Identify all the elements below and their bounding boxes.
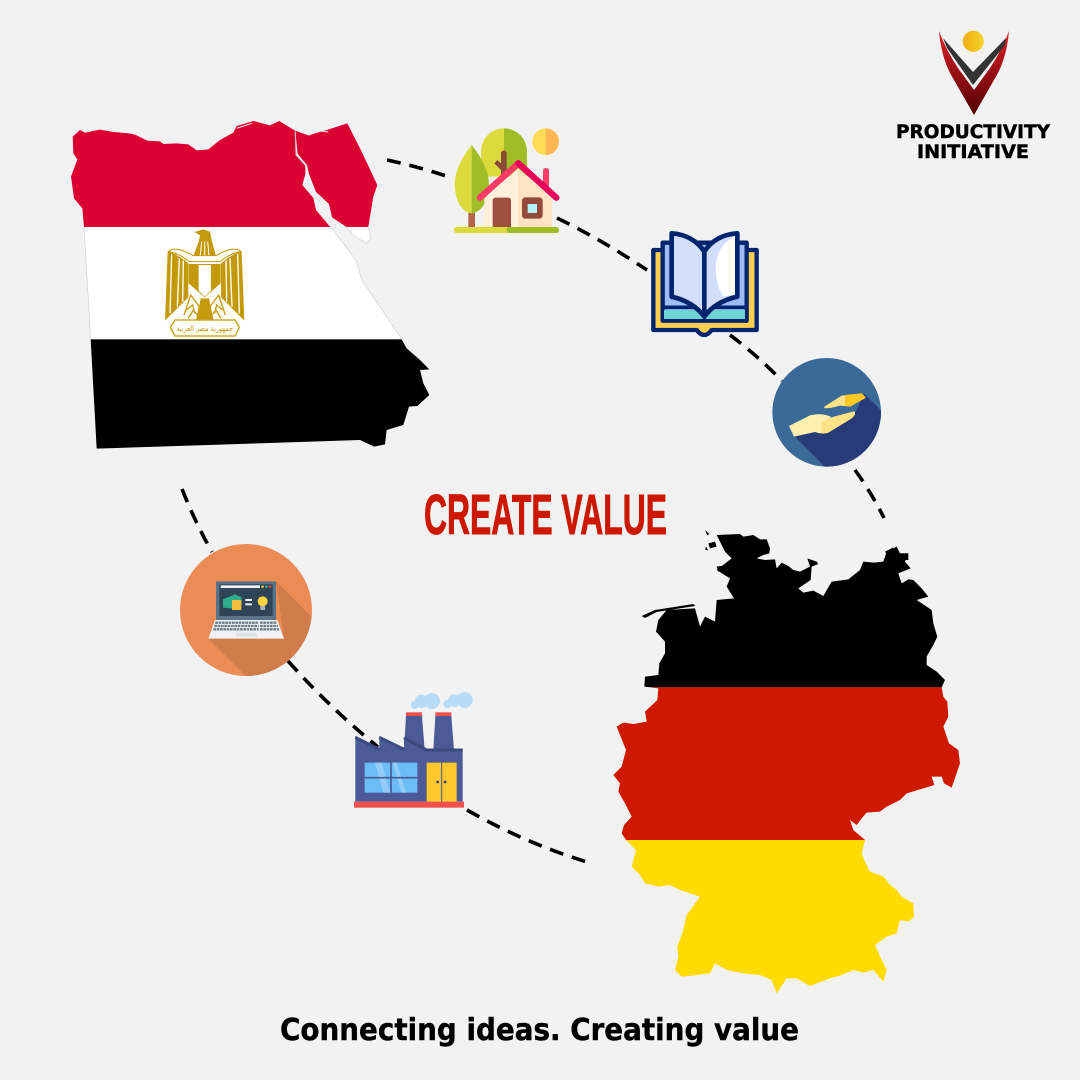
- icon: house with trees: [454, 128, 559, 233]
- map: Egypt flag: [60, 110, 440, 453]
- map: Germany flag: [600, 520, 970, 1000]
- icon: eagle of Saladin: [165, 229, 244, 336]
- tagline: Connecting ideas. Creating value: [280, 1013, 799, 1048]
- logo: Productivity Initiative: INITIATIVE: [917, 141, 1029, 163]
- icon: helping hands badge: [772, 358, 881, 467]
- title: CREATE VALUE: [424, 483, 667, 547]
- icon: factory: [354, 692, 473, 808]
- dashed connector arcs: [182, 160, 884, 862]
- icon: open book: [653, 233, 757, 335]
- icon: laptop idea badge: [180, 544, 317, 680]
- logo: Productivity Initiative: [896, 31, 1050, 163]
- logo: Productivity Initiative: PRODUCTIVITY: [896, 121, 1050, 143]
- icon: eagle of Saladin: جمهورية مصر العربية: [176, 324, 233, 333]
